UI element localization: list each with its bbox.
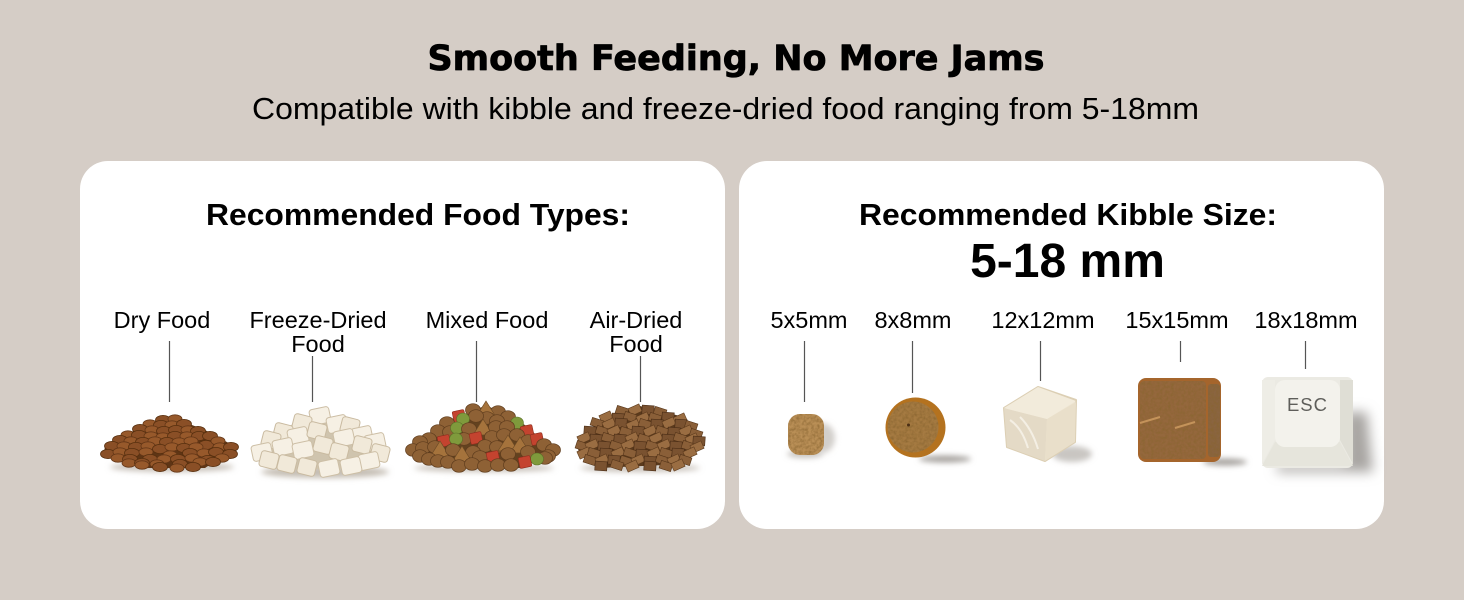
icon: 8mm round kibble	[886, 398, 971, 462]
food type: freeze-dried food	[249, 307, 391, 478]
label: dry food: Dry Food	[114, 307, 210, 333]
heading: recommended food types: Recommended Food Types:	[206, 197, 630, 232]
panel: recommended food types	[80, 161, 725, 529]
panel: recommended kibble size	[739, 161, 1384, 529]
food type: mixed food	[406, 307, 560, 472]
size: 5x5mm	[770, 307, 848, 458]
label: 8x8mm: 8x8mm	[874, 307, 952, 333]
size range value: 5-18 mm	[970, 235, 1165, 288]
size: 12x12mm	[991, 307, 1095, 462]
icon: 5mm kibble	[787, 414, 835, 458]
food type: air-dried food	[575, 307, 705, 472]
label: air-dried food: Air-Dried	[590, 307, 682, 333]
label: 12x12mm: 12x12mm	[991, 307, 1095, 333]
label: freeze-dried food: Food	[291, 331, 345, 357]
key legend: ESC	[1287, 394, 1328, 415]
icon: freeze-dried cube pile	[251, 406, 391, 478]
title: Smooth Feeding, No More Jams	[428, 39, 1044, 79]
label: 5x5mm: 5x5mm	[770, 307, 848, 333]
icon: dry kibble pile	[100, 415, 238, 472]
heading: recommended kibble size: Recommended Kibble Size:	[859, 197, 1277, 232]
label: air-dried food: Food	[609, 331, 663, 357]
icon: 15mm square kibble	[1138, 378, 1247, 466]
label: mixed food: Mixed Food	[426, 307, 548, 333]
size: 15x15mm	[1125, 307, 1247, 466]
size: 18x18mm	[1254, 307, 1373, 472]
size: 8x8mm	[874, 307, 971, 462]
icon: 12mm freeze-dried cube	[1004, 387, 1092, 462]
label: 15x15mm: 15x15mm	[1125, 307, 1229, 333]
icon: mixed kibble pile	[406, 401, 560, 472]
icon: air-dried chunk pile	[575, 404, 705, 472]
food type: dry food	[100, 307, 238, 472]
label: 18x18mm: 18x18mm	[1254, 307, 1358, 333]
subtitle: Compatible with kibble and freeze-dried food ranging from 5-18mm	[252, 91, 1199, 126]
label: freeze-dried food: Freeze-Dried	[249, 307, 387, 333]
icon: ESC keycap	[1262, 377, 1373, 472]
